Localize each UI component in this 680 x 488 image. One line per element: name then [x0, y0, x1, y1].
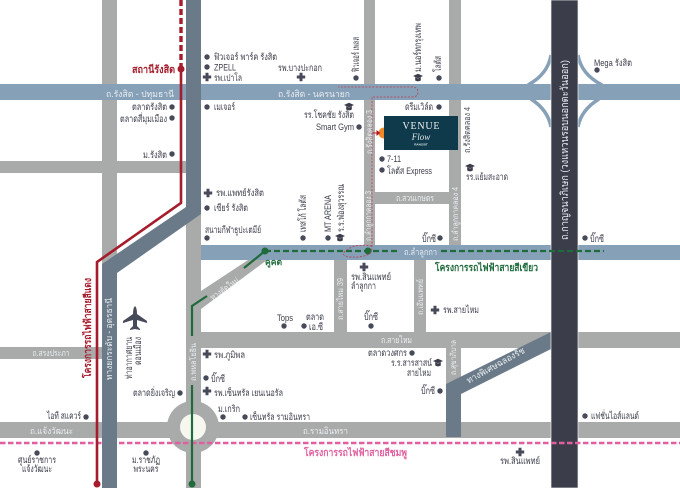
transit line labels: สถานีรังสิต	[132, 63, 175, 76]
road labels: ถ.รังสิตคลอง 3	[365, 110, 374, 154]
expressway: Don Mueang tollway	[102, 0, 201, 488]
place labels: ตลาด	[306, 312, 324, 323]
transit line labels: โครงการรถไฟฟ้าสายสีชมพู	[303, 446, 407, 460]
icon: airplane with airport label: ท่าอากาศยาน	[124, 337, 135, 379]
place labels: บิ๊กซี	[211, 371, 225, 385]
place labels: พระนคร	[134, 464, 158, 475]
place labels: แฟชั่นไอส์แลนด์	[591, 409, 639, 422]
road labels: ถ.พหลโยธิน	[188, 343, 198, 381]
place labels: สายไหม	[407, 367, 431, 379]
road labels: ถ.ลำลูกกาคลอง 3	[364, 191, 374, 241]
road labels: ทางพิเศษฉลองรัช	[465, 345, 526, 386]
place labels: ตลาดรังสิต	[132, 102, 167, 113]
icon: airplane with airport label	[123, 306, 147, 379]
place labels: รพ.ภูมิพล	[214, 350, 245, 361]
road labels: ถ.กาญจนาภิเษก (วงแหวนรอบนอกตะวันออก)	[559, 60, 571, 240]
green line	[188, 248, 604, 488]
place labels: รพ.เซ็นทรัล เยนเนอรัล	[214, 386, 283, 399]
place labels: ฟิวเจอร์ พาร์ค รังสิต	[214, 51, 277, 63]
place labels: ฟิวเจอร์ เพลส	[350, 37, 362, 72]
place labels: รพ.สินแพทย์	[500, 455, 540, 467]
road labels: ถ.เอิบแพทย์	[415, 279, 425, 315]
place labels: รร.แย้มสะอาด	[466, 172, 508, 183]
place labels: บิ๊กซี	[422, 231, 436, 245]
road labels: ทางยกระดับ - อุตรธานี	[104, 298, 115, 380]
transit line labels: โครงการรถไฟฟ้าสายสีแดง	[81, 278, 94, 379]
place labels: สนามกีฬาธูปะเตมีย์	[205, 224, 261, 236]
red line	[94, 0, 184, 488]
place labels: ดรีมเวิล์ด	[405, 101, 433, 113]
road labels: ถ.สรงประภา	[32, 348, 70, 358]
pink line	[0, 442, 680, 444]
circle island	[180, 414, 206, 440]
road labels: ถ.สายไหม 39	[336, 278, 345, 320]
place labels: 7-11	[387, 154, 401, 165]
place labels: ตลาดวงศกร	[368, 348, 407, 359]
place labels: ตลาดยิ่งเจริญ	[133, 386, 175, 399]
road labels: ถ.รังสิตคลอง 4	[462, 107, 472, 153]
venue logo panel: RANGSIT	[414, 142, 428, 146]
place labels: เมเจอร์	[214, 101, 235, 113]
place labels: แจ้งวัฒนะ	[22, 464, 52, 475]
road labels: ถ.ลำลูกกา	[404, 247, 437, 258]
place labels: เทสโก้ โลตัส	[297, 195, 309, 232]
place labels: บิ๊กซี	[421, 383, 435, 397]
road labels: ถ.รามอินทรา	[303, 426, 348, 436]
cloverleaf interchange	[528, 55, 602, 127]
place labels: Tops	[277, 313, 293, 324]
place labels: รพ.แพทย์รังสิต	[216, 187, 264, 199]
venue logo panel: Flow	[411, 132, 430, 142]
transit line labels: คูคต	[265, 257, 282, 268]
road labels: ถ.ลำลูกกาคลอง 4	[451, 187, 461, 241]
place labels: ZPELL	[214, 62, 236, 74]
expressway: Chalong Rat	[446, 332, 551, 437]
place labels: เอ.ซี	[309, 321, 323, 333]
blue main roads	[0, 84, 680, 260]
place labels: บิ๊กซี	[590, 231, 604, 245]
place labels: ตลาดสี่มุมเมือง	[120, 112, 167, 125]
Kanchanaphisek highway	[551, 0, 578, 488]
place labels: รพ.สายไหม	[443, 304, 479, 316]
place labels: เซียร์ รังสิต	[214, 202, 248, 214]
place labels: MT ARENA	[323, 194, 334, 232]
place labels: ร.ร.สารสาสน์	[391, 357, 432, 369]
place labels: ม.นอร์ทกรุงเทพ	[412, 23, 424, 72]
place labels: Smart Gym	[316, 122, 354, 133]
road labels: ถ.รังสิต - นครนายก	[278, 89, 350, 99]
place labels: ม.เกริก	[218, 404, 240, 415]
road labels	[30, 60, 571, 436]
place labels: โลตัส	[432, 56, 444, 72]
place labels: ร.ร.ฟ่องสุวรรณ	[336, 184, 347, 232]
place labels: รร.โชคชัย รังสิต	[304, 109, 354, 121]
place labels: รพ.เปาโล	[214, 72, 242, 84]
place labels: ศูนย์ราชการ	[18, 454, 56, 466]
icon: airplane with airport label: ดอนเมือง	[133, 337, 144, 365]
place labels: ไอที สแควร์	[46, 410, 81, 422]
place labels: บิ๊กซี	[364, 309, 378, 323]
transit line labels: โครงการรถไฟฟ้าสายสีเขียว	[434, 261, 538, 274]
place labels: ม.รังสิต	[143, 150, 167, 161]
place labels: เซ็นทรัล รามอินทรา	[250, 410, 310, 423]
road labels: ถ.สวนเกษตร	[396, 193, 434, 203]
place labels: ม.ราชภัฏ	[132, 455, 160, 466]
road labels: ถ.สุขาภิบาล	[449, 340, 458, 375]
venue logo panel: VENUE	[402, 121, 440, 132]
venue logo panel	[373, 116, 458, 150]
dotted access route	[338, 87, 418, 257]
road labels: ถ.สายไหม	[381, 335, 412, 345]
road labels: ถ.แจ้งวัฒนะ	[30, 426, 73, 436]
road labels: ทางตัดใหม่	[208, 276, 241, 302]
road labels: ถ.รังสิต - ปทุมธานี	[106, 89, 174, 100]
place labels: Mega รังสิต	[594, 58, 632, 69]
place labels: รพ.บางปะกอก	[278, 63, 322, 74]
transit line labels	[81, 63, 538, 460]
place markers	[34, 54, 600, 456]
place labels: ลำลูกกา	[351, 281, 376, 292]
place labels: รพ.สินแพทย์	[351, 271, 391, 283]
place labels: โลตัส Express	[387, 165, 432, 177]
